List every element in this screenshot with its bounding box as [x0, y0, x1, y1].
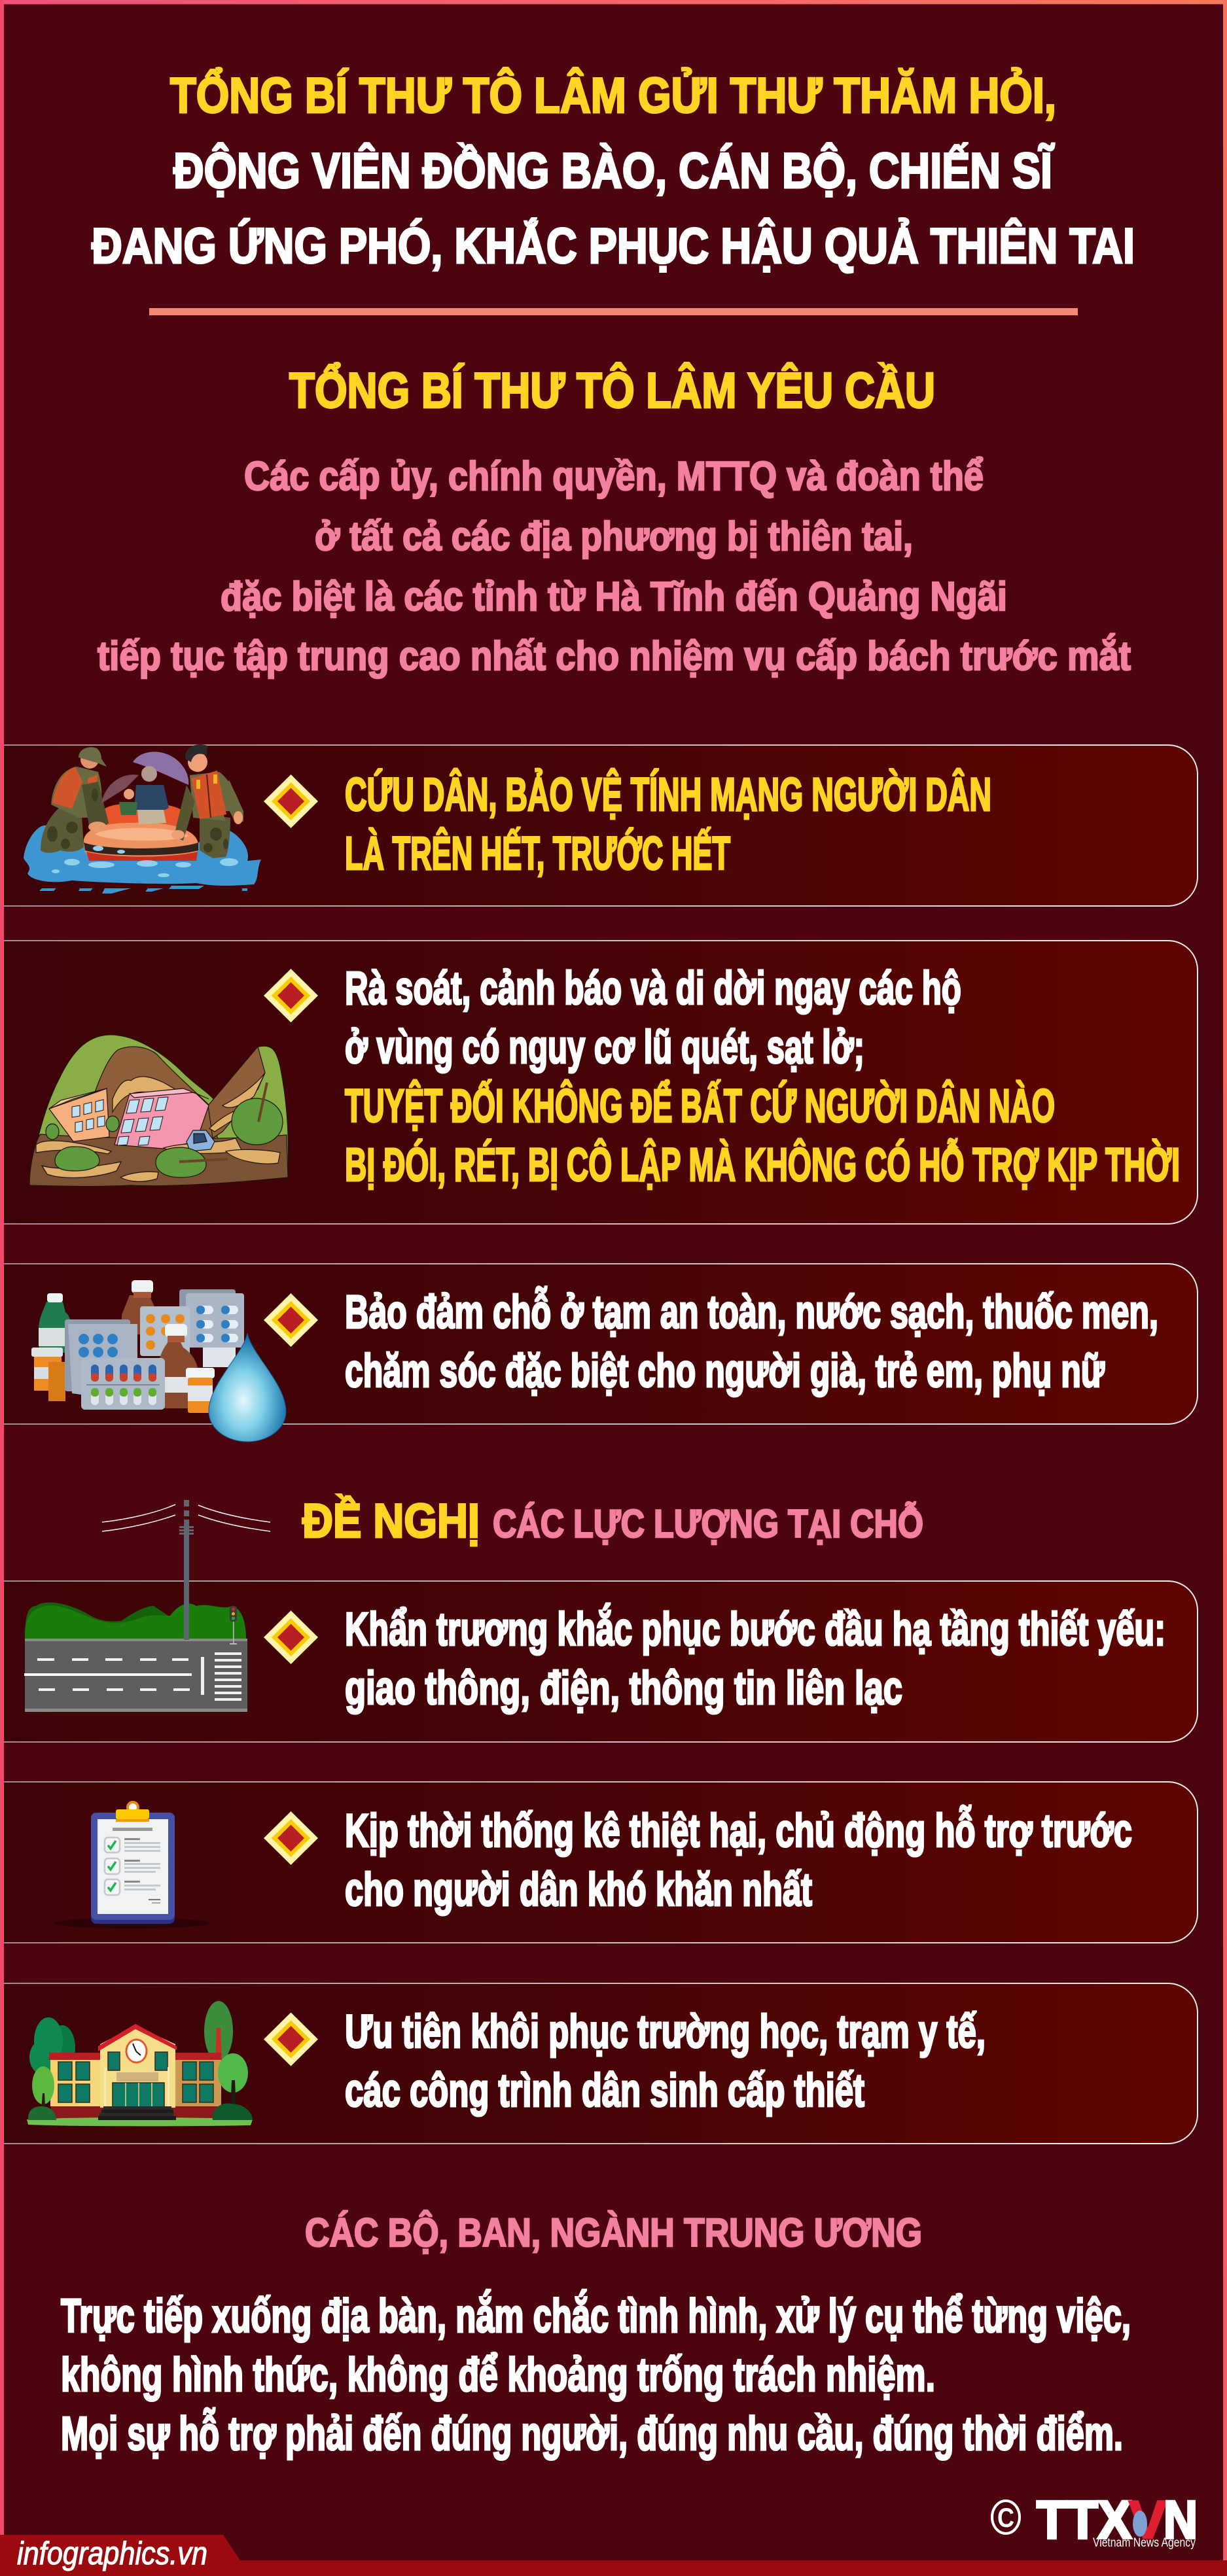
logo: TTXVN: TTX [1037, 2490, 1131, 2550]
diamond bullet [264, 969, 318, 1022]
logo: TTXVN [992, 2490, 1198, 2550]
title: TỔNG BÍ THƯ TÔ LÂM GỬI THƯ THĂM HỎI, [170, 67, 1056, 124]
text: infrastructure [345, 1604, 1165, 1714]
icon: school [27, 2001, 253, 2126]
text: rescue [345, 769, 991, 880]
logo: TTXVN: C [997, 2502, 1014, 2533]
heading: local forces: ĐỀ NGHỊ [302, 1495, 480, 1548]
diamond bullet [264, 2012, 318, 2066]
intro text: đặc biệt là các tỉnh từ Hà Tĩnh đến Quảng Ngãi [221, 574, 1007, 619]
diamond bullet [264, 1293, 318, 1347]
icon: clipboard [54, 1802, 210, 1928]
footer band [0, 2535, 1227, 2576]
heading: request: TỔNG BÍ THƯ TÔ LÂM YÊU CẦU [289, 362, 935, 419]
intro text: Các cấp ủy, chính quyền, MTTQ và đoàn thể [244, 454, 984, 499]
text: infrastructure: giao thông, điện, thông tin liên lạc [345, 1663, 902, 1714]
text: rescue: LÀ TRÊN HẾT, TRƯỚC HẾT [345, 827, 730, 880]
intro text: ở tất cả các địa phương bị thiên tai, [315, 514, 913, 559]
panel: damage statistics [0, 1782, 1198, 1943]
heading: local forces [302, 1495, 923, 1548]
icon: rescue boat [24, 744, 261, 894]
logo: TTXVN: V [1129, 2490, 1167, 2550]
diamond bullet [264, 1811, 318, 1865]
heading: central ministries: CÁC BỘ, BAN, NGÀNH TRUNG ƯƠNG [305, 2210, 922, 2255]
diamond bullet [264, 775, 318, 828]
icon: landslide [29, 1035, 288, 1187]
text: evacuation [345, 963, 1180, 1191]
panel: shelter and medicine [0, 1264, 1198, 1424]
text: schools: Ưu tiên khôi phục trường học, trạm y tế, [345, 2006, 986, 2058]
panel: rescue people [0, 744, 1198, 906]
text: schools: các công trình dân sinh cấp thiết [345, 2065, 864, 2117]
text: evacuation: Rà soát, cảnh báo và di dời ngay các hộ [345, 963, 961, 1015]
logo: TTXVN: Vietnam News Agency [1093, 2536, 1196, 2550]
text: shelter [345, 1287, 1158, 1397]
panel: evacuation [0, 941, 1198, 1224]
water drop [209, 1333, 286, 1442]
panel: infrastructure [0, 1500, 1198, 1742]
icon: medicine and water drop [31, 1280, 286, 1442]
title [92, 67, 1135, 274]
diamond bullet [264, 1610, 318, 1664]
text: evacuation: ở vùng có nguy cơ lũ quét, sạt lở; [345, 1022, 864, 1073]
source label: infographics.vn [17, 2536, 207, 2571]
intro text [98, 454, 1131, 679]
logo: TTXVN: N [1164, 2490, 1198, 2550]
icon: road and power pole [24, 1500, 270, 1712]
panel: schools and clinics [0, 1983, 1198, 2144]
closing text [61, 2289, 1131, 2460]
heading: local forces: CÁC LỰC LƯỢNG TẠI CHỖ [493, 1502, 923, 1546]
text: schools [345, 2006, 986, 2117]
text: statistics: cho người dân khó khăn nhất [345, 1864, 812, 1916]
text: statistics [345, 1805, 1132, 1916]
title: ĐỘNG VIÊN ĐỒNG BÀO, CÁN BỘ, CHIẾN SĨ [173, 143, 1055, 199]
